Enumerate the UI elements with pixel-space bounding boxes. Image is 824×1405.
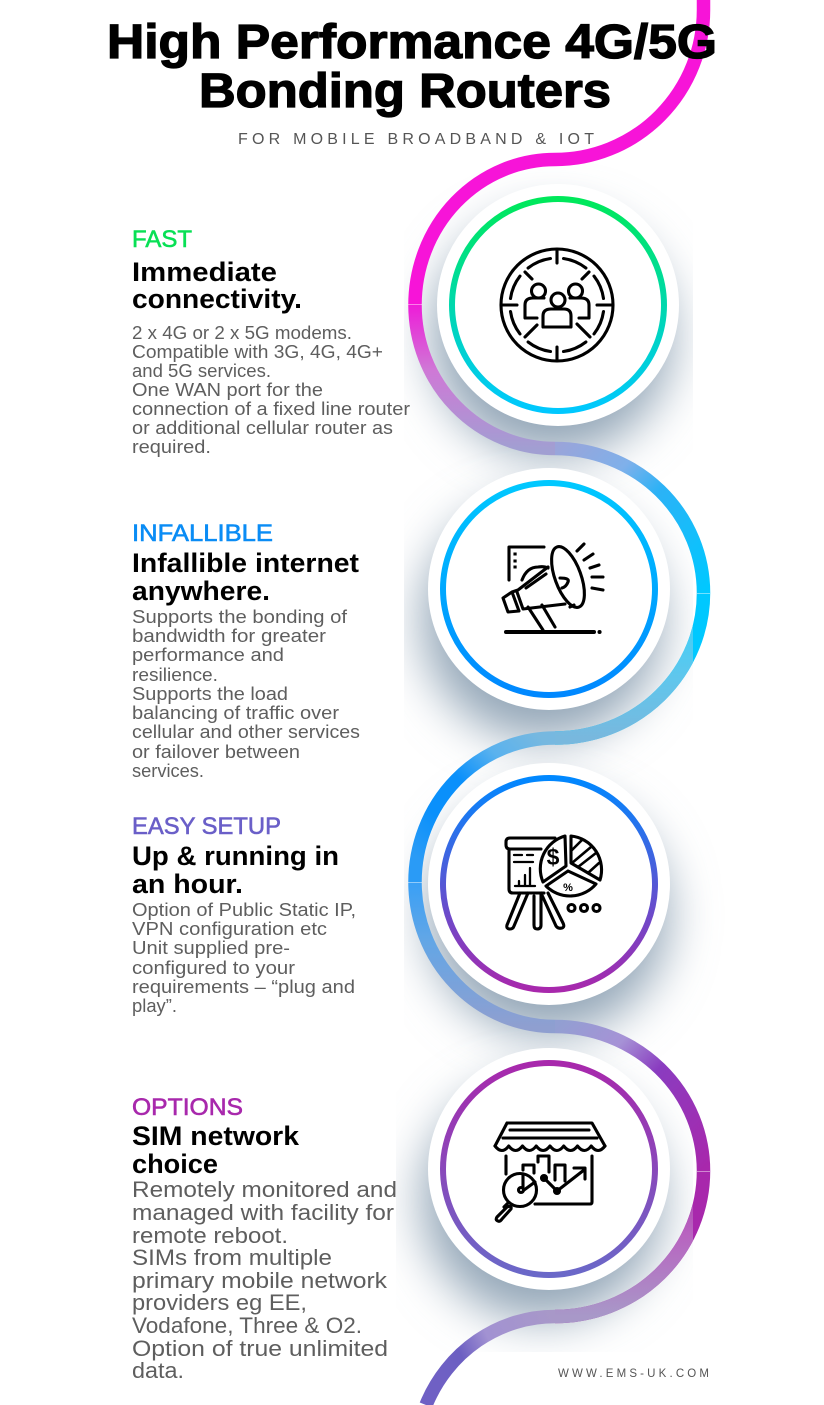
- subheading: connectivity.: [132, 284, 302, 314]
- panel: INFALLIBLE text: [132, 520, 360, 781]
- heading: FAST: FAST: [132, 226, 192, 253]
- body text: or failover between: [132, 742, 300, 762]
- title: High Performance 4G/5G: [107, 16, 717, 69]
- body text: [132, 607, 360, 781]
- icon: megaphone: [503, 542, 603, 632]
- body text: or additional cellular router as: [132, 418, 393, 438]
- subheading: [132, 548, 359, 606]
- icon: storefront with chart and magnifier: [495, 1123, 605, 1221]
- body text: data.: [132, 1358, 184, 1383]
- body text: remote reboot.: [132, 1223, 288, 1248]
- footer url: WWW.EMS-UK.COM: [558, 1368, 709, 1380]
- subheading: anywhere.: [132, 576, 270, 606]
- body text: [132, 1177, 397, 1383]
- icon: presentation board with pie chart: %: [563, 882, 573, 894]
- heading: OPTIONS: OPTIONS: [132, 1094, 243, 1121]
- panel: circle 4: [428, 1048, 670, 1290]
- subheading: an hour.: [132, 869, 243, 899]
- subheading: Up & running in: [132, 841, 339, 871]
- subheading: Immediate: [132, 257, 277, 287]
- panel: OPTIONS text: [132, 1094, 397, 1383]
- body text: and 5G services.: [132, 361, 271, 381]
- body text: cellular and other services: [132, 722, 360, 742]
- body text: Unit supplied pre-: [132, 938, 290, 958]
- body text: [132, 900, 356, 1016]
- panel: FAST text: [132, 226, 410, 457]
- icon: target with people: [501, 249, 613, 361]
- subheading: [132, 841, 339, 899]
- body text: configured to your: [132, 958, 295, 978]
- body text: play”.: [132, 996, 177, 1016]
- panel: EASY SETUP text: [132, 813, 356, 1016]
- body text: providers eg EE,: [132, 1290, 307, 1315]
- heading: EASY SETUP: EASY SETUP: [132, 813, 281, 840]
- body text: Remotely monitored and: [132, 1177, 397, 1202]
- body text: One WAN port for the: [132, 380, 323, 400]
- body text: Compatible with 3G, 4G, 4G+: [132, 342, 383, 362]
- body text: services.: [132, 761, 204, 781]
- subheading: SIM network: [132, 1121, 300, 1151]
- title: [107, 16, 717, 118]
- panel: circle 3: [428, 763, 670, 1005]
- subheading: choice: [132, 1149, 218, 1179]
- body text: required.: [132, 437, 211, 457]
- body text: Option of Public Static IP,: [132, 900, 356, 920]
- heading: INFALLIBLE: INFALLIBLE: [132, 520, 273, 547]
- panel: circle 2: [428, 468, 670, 710]
- body text: Option of true unlimited: [132, 1336, 388, 1361]
- body text: resilience.: [132, 665, 218, 685]
- body text: Supports the load: [132, 684, 288, 704]
- body text: performance and: [132, 645, 284, 665]
- body text: bandwidth for greater: [132, 626, 326, 646]
- body text: SIMs from multiple: [132, 1245, 332, 1270]
- subheading: [132, 1121, 300, 1179]
- body text: primary mobile network: [132, 1268, 388, 1293]
- subheading: [132, 257, 302, 314]
- body text: [132, 323, 410, 457]
- body text: 2 x 4G or 2 x 5G modems.: [132, 323, 352, 343]
- title: Bonding Routers: [199, 65, 611, 118]
- panel: circle 1: [437, 184, 679, 426]
- body text: managed with facility for: [132, 1200, 394, 1225]
- winding gradient path: [408, 0, 710, 1405]
- body text: balancing of traffic over: [132, 703, 339, 723]
- body text: Supports the bonding of: [132, 607, 348, 627]
- icon: presentation board with pie chart: [506, 836, 602, 929]
- body text: connection of a fixed line router: [132, 399, 410, 419]
- icon: presentation board with pie chart: $: [547, 844, 560, 870]
- body text: VPN configuration etc: [132, 919, 327, 939]
- body text: Vodafone, Three & O2.: [132, 1313, 362, 1338]
- soft shadows under circles: [422, 216, 672, 1320]
- subheading: Infallible internet: [132, 548, 359, 578]
- body text: requirements – “plug and: [132, 977, 355, 997]
- subtitle: FOR MOBILE BROADBAND & IOT: [238, 131, 594, 148]
- infographic canvas: [110, 0, 714, 1405]
